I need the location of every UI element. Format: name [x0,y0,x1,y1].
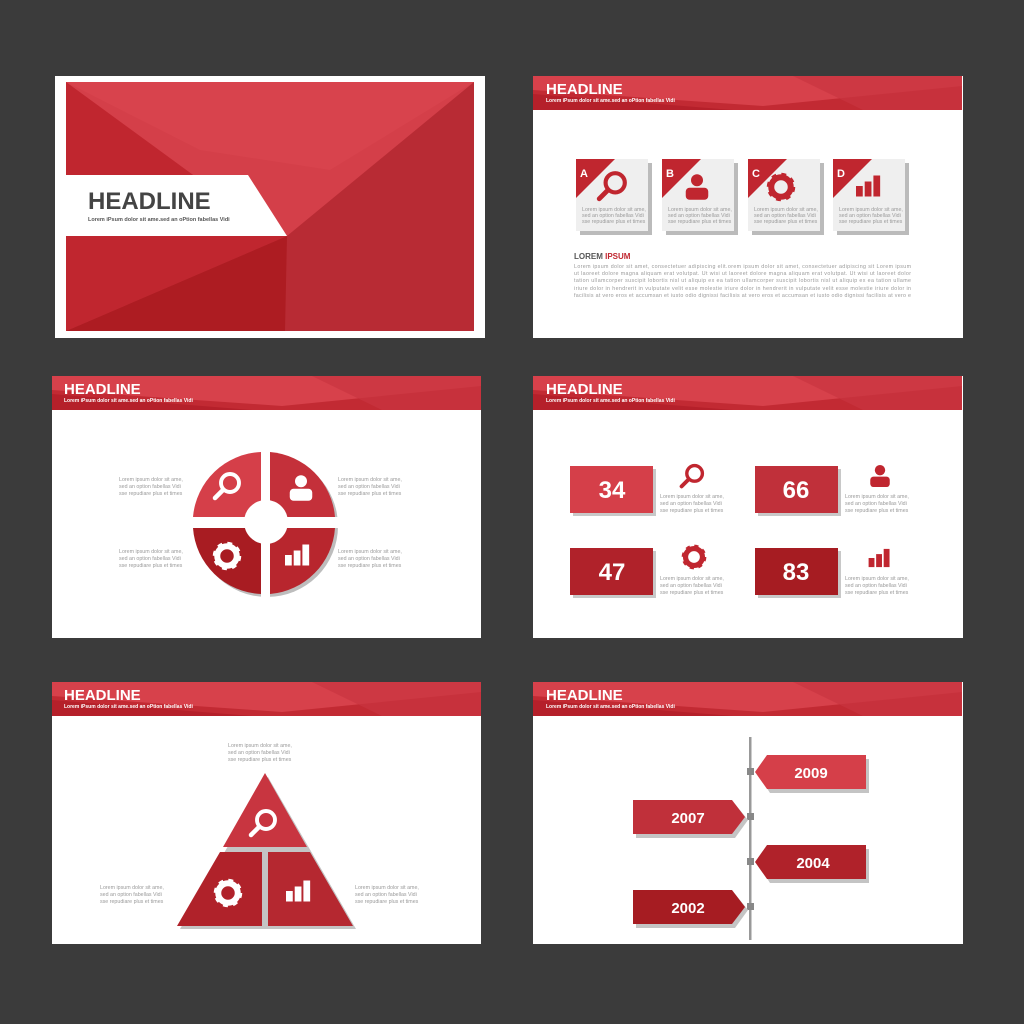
cover subtitle: Lorem iPsum dolor sit ame.sed an oPtion fabellas Vidi [88,217,230,223]
card C: Lorem ipsum dolor sit ame, [754,207,818,213]
text blocks: sed an option fabellas Vidi [228,750,290,756]
card B [662,159,738,235]
text blocks: Lorem ipsum dolor sit ame, [228,743,292,749]
number 83 [755,548,841,598]
text blocks: sse repudiare plus et times [845,590,909,596]
text blocks: Lorem ipsum dolor sit ame, [355,885,419,891]
text blocks: sse repudiare plus et times [119,491,183,497]
card A: Lorem ipsum dolor sit ame, [582,207,646,213]
headline: HEADLINE [546,687,623,704]
timeline line [747,737,754,940]
lorem ipsum paragraph: tation ullamcorper suscipit lobortis nisl ut aliquip ex ea tation ullamcorper suscipit lobortis nisl ut aliquip ex ea tation ullame [574,278,911,284]
number 66 [755,466,841,516]
year 2009: 2009 [794,765,828,782]
cover headline: HEADLINE [88,188,211,215]
text blocks: Lorem ipsum dolor sit ame, [338,477,402,483]
year 2004 [755,845,869,883]
text blocks: sse repudiare plus et times [338,491,402,497]
text blocks: sed an option fabellas Vidi [119,484,181,490]
text blocks: sse repudiare plus et times [228,757,292,763]
text blocks: sse repudiare plus et times [660,508,724,514]
card C: sed an option fabellas Vidi [754,213,816,219]
text blocks: sed an option fabellas Vidi [119,556,181,562]
text blocks [660,494,909,596]
lorem ipsum paragraph: iriure dolor in hendrerit in vulputate velit esse molestie iriure dolor in hendrerit in vulputate velit esse molestie iriure dolor in [574,286,911,292]
text blocks: sse repudiare plus et times [338,563,402,569]
text blocks: sed an option fabellas Vidi [660,501,722,507]
cover white band [66,175,287,236]
headline: HEADLINE [546,81,623,98]
text blocks: sse repudiare plus et times [100,899,164,905]
card D [833,159,909,235]
card D: D [837,168,845,180]
lorem ipsum paragraph: LOREM IPSUM [574,252,631,261]
year 2007: 2007 [671,810,705,827]
year 2002 [633,890,748,928]
year 2004: 2004 [796,855,830,872]
card A [576,159,652,235]
card C [748,159,824,235]
text blocks: Lorem ipsum dolor sit ame, [338,549,402,555]
year 2007 [633,800,748,838]
panel: circle slide [52,376,481,638]
card A: A [580,168,588,180]
number 83: 83 [783,559,809,586]
text blocks: sed an option fabellas Vidi [100,892,162,898]
panel: pyramid slide: Lorem iPsum dolor sit ame.sed an oPtion fabellas Vidi [64,704,193,710]
card C: C [752,168,760,180]
headline: HEADLINE [546,381,623,398]
text blocks: Lorem ipsum dolor sit ame, [660,494,724,500]
card A: sse repudiare plus et times [582,219,646,225]
card A: sed an option fabellas Vidi [582,213,644,219]
card B: B [666,168,674,180]
panel: pyramid slide [52,682,481,944]
text blocks: sed an option fabellas Vidi [338,484,400,490]
circle diagram [186,445,341,600]
text blocks: sse repudiare plus et times [660,590,724,596]
text blocks: Lorem ipsum dolor sit ame, [100,885,164,891]
lorem ipsum paragraph: facilisis at vero eros et accumsan et iusto odio dignissi facilisis at vero eros et accumsan et iusto odio dignissi facilisis at vero e [574,293,911,299]
number 34: 34 [599,477,626,504]
card C: sse repudiare plus et times [754,219,818,225]
text blocks: sed an option fabellas Vidi [660,583,722,589]
lorem ipsum paragraph [574,252,912,299]
card B: sse repudiare plus et times [668,219,732,225]
text blocks: Lorem ipsum dolor sit ame, [119,549,183,555]
text blocks: sed an option fabellas Vidi [338,556,400,562]
text blocks: Lorem ipsum dolor sit ame, [845,494,909,500]
panel: numbers slide: Lorem iPsum dolor sit ame.sed an oPtion fabellas Vidi [546,398,675,404]
icons [682,465,890,567]
panel: cover slide [55,76,485,338]
panel: ABCD slide [533,76,963,338]
card B: Lorem ipsum dolor sit ame, [668,207,732,213]
text blocks: sed an option fabellas Vidi [355,892,417,898]
year 2009 [755,755,869,793]
panel: timeline slide [533,682,963,944]
text blocks [119,477,402,569]
pyramid [177,773,356,929]
panel: numbers slide [533,376,963,638]
card B: sed an option fabellas Vidi [668,213,730,219]
text blocks [100,743,419,905]
text blocks: Lorem ipsum dolor sit ame, [119,477,183,483]
panel: timeline slide: Lorem iPsum dolor sit ame.sed an oPtion fabellas Vidi [546,704,675,710]
text blocks: sse repudiare plus et times [119,563,183,569]
number 47: 47 [599,559,625,586]
number 66: 66 [783,477,809,504]
text blocks: sed an option fabellas Vidi [845,501,907,507]
number 34 [570,466,656,516]
text blocks: sse repudiare plus et times [845,508,909,514]
card D: Lorem ipsum dolor sit ame, [839,207,903,213]
lorem ipsum paragraph: Lorem ipsum dolor sit amet, consectetuer adipiscing elit.orem ipsum dolor sit amet, consectetuer adipiscing sit Lorem ipsum [574,264,912,270]
lorem ipsum paragraph: ut laoreet dolore magna aliquam erat volutpat. Ut wisi ut laoreet dolore magna aliquam erat volutpat. Ut wisi ut laoreet dolor [574,271,911,277]
panel: ABCD slide: Lorem iPsum dolor sit ame.sed an oPtion fabellas Vidi [546,98,675,104]
text blocks: Lorem ipsum dolor sit ame, [660,576,724,582]
year 2002: 2002 [671,900,705,917]
number 47 [570,548,656,598]
headline: HEADLINE [64,687,141,704]
headline: HEADLINE [64,381,141,398]
card D: sse repudiare plus et times [839,219,903,225]
text blocks: Lorem ipsum dolor sit ame, [845,576,909,582]
panel: circle slide: Lorem iPsum dolor sit ame.sed an oPtion fabellas Vidi [64,398,193,404]
text blocks: sed an option fabellas Vidi [845,583,907,589]
card D: sed an option fabellas Vidi [839,213,901,219]
text blocks: sse repudiare plus et times [355,899,419,905]
